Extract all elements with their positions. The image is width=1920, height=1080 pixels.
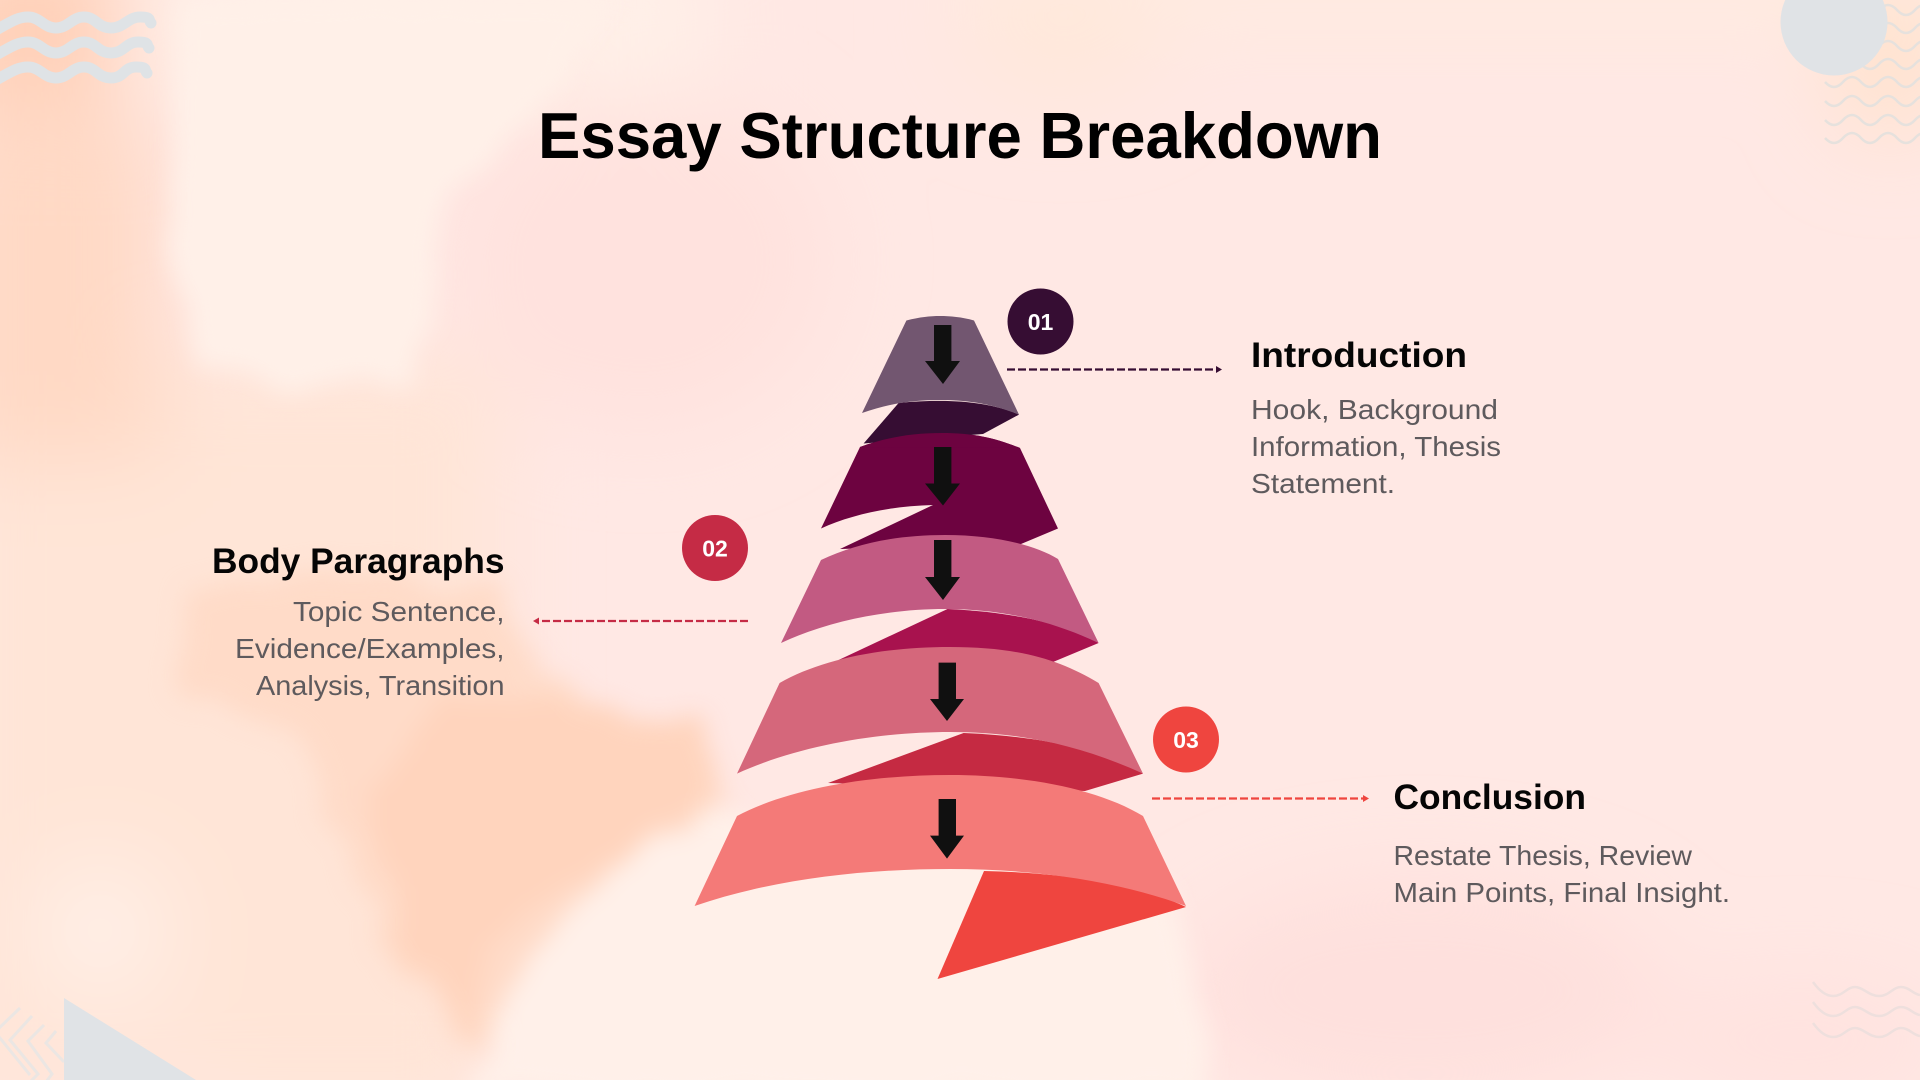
tier 3 underside — [839, 609, 1099, 662]
text: introduction: Statement. — [1251, 468, 1395, 499]
badge 02: 02 — [702, 536, 728, 562]
badge 01 — [1008, 288, 1074, 354]
badge 03: 03 — [1173, 727, 1199, 753]
decoration: thick waves top left — [0, 17, 151, 81]
dashed arrow: body paragraphs — [533, 618, 748, 624]
spiral pyramid diagram — [695, 316, 1186, 979]
dashed arrow: introduction — [1007, 366, 1222, 373]
text: body paragraphs: Topic Sentence, — [293, 596, 504, 627]
tier 2 band — [821, 433, 1058, 549]
text: conclusion — [1394, 778, 1730, 908]
text: conclusion: Restate Thesis, Review — [1394, 840, 1693, 871]
badge 01: 01 — [1028, 309, 1053, 335]
tier 4 underside — [828, 733, 1143, 791]
text: body paragraphs: Analysis, Transition — [256, 670, 504, 701]
tier 5 underside — [938, 871, 1186, 979]
badge 03 — [1153, 706, 1219, 772]
tier 3 band — [781, 535, 1099, 643]
text: body paragraphs: Evidence/Examples, — [235, 633, 504, 664]
tier 4 band — [737, 647, 1143, 774]
dashed arrow: conclusion — [1152, 795, 1369, 802]
tier 2 top overlay — [860, 433, 1020, 448]
decoration: chevrons bottom left — [0, 1008, 64, 1080]
text: body paragraphs: Body Paragraphs — [212, 542, 505, 581]
decoration: grey triangle bottom left — [64, 998, 196, 1080]
badge 02 — [682, 515, 748, 581]
text: introduction: Hook, Background — [1251, 394, 1498, 425]
text: conclusion: Main Points, Final Insight. — [1394, 877, 1730, 908]
text: introduction: Information, Thesis — [1251, 431, 1501, 462]
text: body paragraphs — [212, 542, 505, 701]
decoration: grey circle top right — [1780, 0, 1888, 76]
arrows — [925, 325, 964, 859]
decoration: thin waves bottom right — [1813, 982, 1920, 1037]
decoration: thin waves top right — [1825, 5, 1920, 143]
tier 1 band — [862, 316, 1019, 415]
text: introduction: Introduction — [1251, 336, 1467, 375]
text: introduction — [1251, 336, 1501, 499]
tier 5 band — [695, 775, 1186, 906]
title: Essay Structure Breakdown — [538, 99, 1382, 172]
text: conclusion: Conclusion — [1394, 778, 1586, 817]
tier 1 underside — [864, 401, 1019, 444]
